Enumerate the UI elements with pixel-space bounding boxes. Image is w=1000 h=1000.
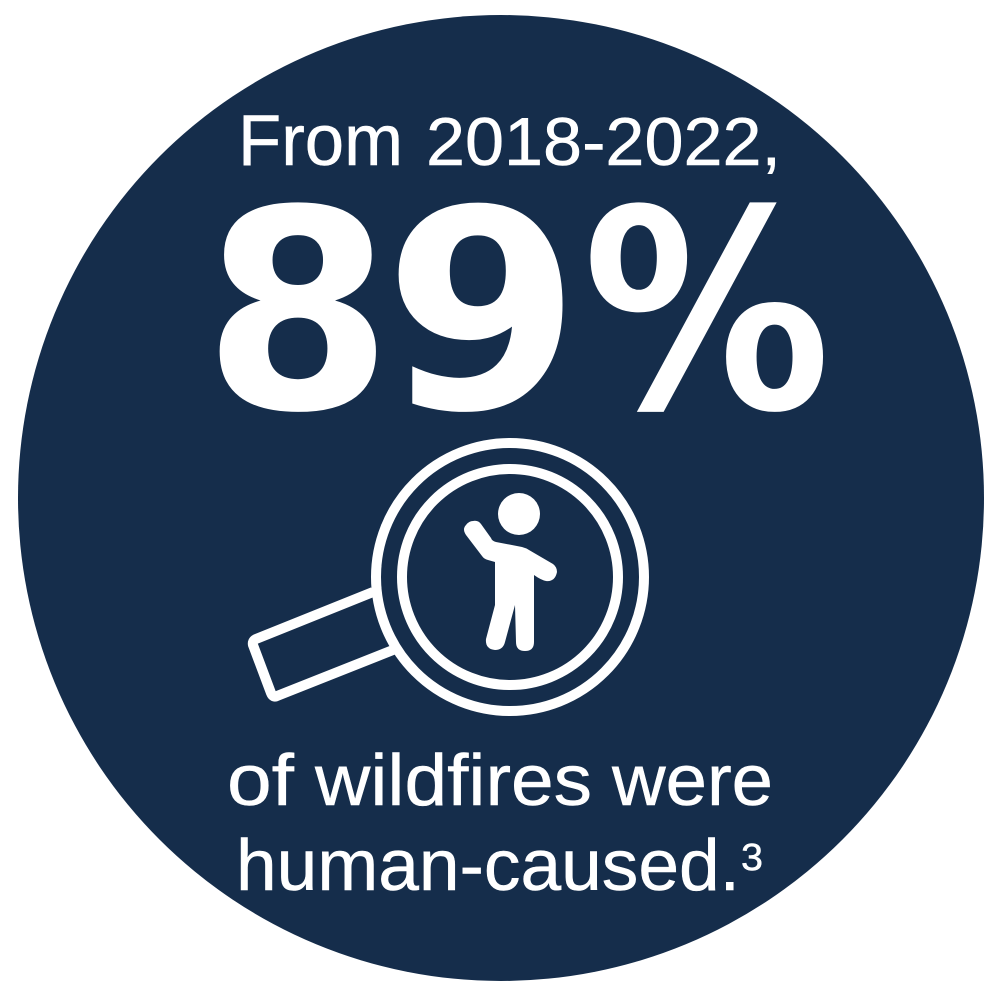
caption line 1: of: [227, 741, 295, 821]
caption line 2: human-caused.: [236, 826, 740, 906]
caption line 1: wildfires: [314, 741, 592, 821]
big statistic: 89%: 8: [203, 151, 393, 473]
big statistic: 89%: 9: [384, 151, 581, 473]
magnifier handle: [253, 592, 393, 697]
heading: From 2018-2022,: [238, 101, 781, 181]
heading: From 2018-2022,: From: [238, 101, 403, 181]
big statistic: 89%: [203, 151, 831, 473]
person figure: [464, 493, 557, 651]
magnifier inner ring: [402, 469, 618, 685]
big statistic: 89%: %: [582, 151, 831, 473]
magnifier outer ring: [376, 443, 644, 711]
caption line 2: 3: [741, 837, 763, 879]
heading: From 2018-2022,: 2018-2022,: [426, 104, 781, 180]
caption line 1: [227, 741, 773, 821]
caption line 1: were: [611, 741, 773, 821]
icon: magnifying glass with person: [253, 443, 644, 711]
